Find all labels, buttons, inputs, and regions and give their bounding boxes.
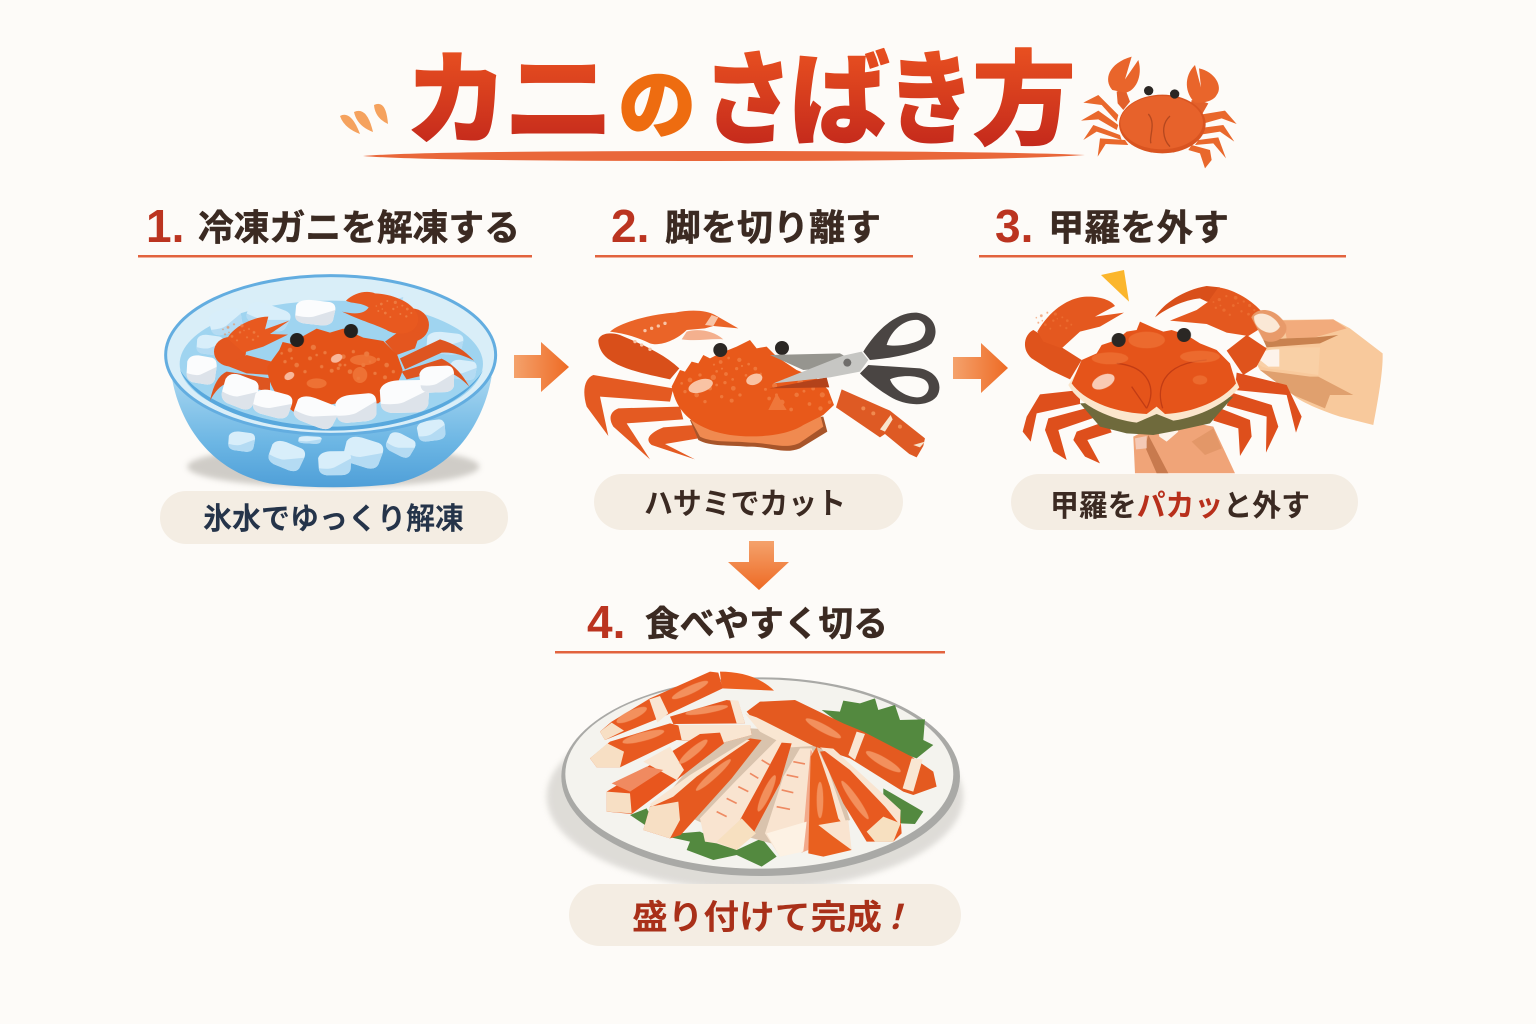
fan piece H bbox=[820, 750, 902, 842]
title text: ば bbox=[790, 44, 890, 158]
submerged ice bbox=[228, 417, 448, 478]
step 1 heading bbox=[138, 200, 532, 258]
step 3 heading bbox=[979, 200, 1346, 258]
icon: yellow accent triangle bbox=[1101, 270, 1129, 302]
fan piece G bbox=[808, 747, 852, 857]
carapace bbox=[267, 329, 403, 412]
step 3 illustration: hands opening crab shell bbox=[1023, 270, 1383, 473]
thumb bbox=[1251, 310, 1286, 342]
step 2 heading: 脚を切り離す bbox=[665, 207, 881, 248]
step 4 illustration: plated crab legs bbox=[547, 672, 963, 890]
step 3 heading: 3. bbox=[995, 200, 1033, 252]
left claw bbox=[214, 317, 289, 375]
garnish leaves bbox=[630, 698, 933, 867]
title block bbox=[340, 44, 1237, 168]
leg piece A2 bbox=[670, 700, 745, 724]
caption pill: step 1: 氷水でゆっくり解凍 bbox=[203, 503, 464, 536]
crab leg pieces bbox=[590, 672, 937, 857]
fan piece E bbox=[700, 740, 792, 850]
crab bbox=[584, 311, 834, 459]
caption pill: step 1 bbox=[160, 491, 508, 544]
caption pill: step 4: ！ bbox=[878, 899, 912, 937]
leg piece A bbox=[600, 672, 723, 740]
step 1 illustration: crab in ice water bowl bbox=[166, 276, 496, 487]
right long leg bbox=[747, 700, 937, 795]
right claw bbox=[1155, 286, 1267, 375]
step 2 heading bbox=[595, 200, 913, 258]
bowl rim bbox=[166, 276, 496, 434]
step 1 heading: 冷凍ガニを解凍する bbox=[198, 207, 520, 248]
arrow: step 2 to 3 bbox=[953, 343, 1008, 393]
leg piece B bbox=[590, 723, 752, 767]
right hand bbox=[1257, 319, 1383, 425]
fan piece D bbox=[643, 738, 762, 838]
legs bbox=[584, 375, 698, 459]
caption pill: step 4: 盛り付けて完成 bbox=[632, 899, 882, 937]
hub shadow under fan bbox=[660, 727, 850, 847]
claw tip bbox=[720, 672, 774, 691]
step 2 heading: 2. bbox=[611, 200, 649, 252]
right claw bbox=[342, 292, 429, 355]
bowl shadow bbox=[187, 446, 479, 487]
legs bbox=[1023, 373, 1302, 463]
legs bbox=[210, 339, 474, 401]
plate shadow bbox=[547, 703, 963, 890]
title underline bbox=[363, 151, 1085, 161]
step 2 illustration: crab and scissors bbox=[584, 311, 939, 459]
step 4 heading bbox=[555, 596, 945, 654]
plate bbox=[561, 677, 960, 876]
back ice bbox=[197, 292, 477, 380]
title text bbox=[405, 44, 1076, 158]
carapace bbox=[672, 340, 834, 436]
upper claw bbox=[598, 311, 738, 379]
severed leg bbox=[836, 389, 925, 457]
fan piece F bbox=[765, 748, 815, 857]
title text: ニ bbox=[503, 44, 615, 158]
caption pill: step 2 bbox=[594, 474, 903, 530]
step 3 heading: 甲羅を外す bbox=[1048, 207, 1229, 248]
title text: き bbox=[887, 44, 975, 158]
step 4 heading: 食べやすく切る bbox=[645, 605, 888, 644]
meat texture highlights bbox=[615, 678, 903, 821]
step 4 heading: 4. bbox=[587, 596, 625, 648]
caption pill: step 3: 甲羅をパカッと外す bbox=[1050, 490, 1310, 523]
front ice bbox=[187, 355, 457, 432]
carapace bbox=[1072, 322, 1236, 414]
left claw bbox=[1025, 297, 1124, 379]
caption pill: step 2: ハサミでカット bbox=[644, 488, 846, 521]
bottom hand bbox=[1133, 423, 1235, 473]
arrow: step 1 to 2 bbox=[514, 342, 569, 392]
icon: motion marks bbox=[340, 104, 388, 134]
crab bbox=[210, 292, 474, 412]
title text: 方 bbox=[972, 44, 1076, 158]
water surface bbox=[180, 301, 483, 427]
step 1 heading: 1. bbox=[146, 200, 184, 252]
caption pill: step 4 bbox=[569, 884, 961, 946]
leg piece C bbox=[607, 733, 724, 814]
shell rim bbox=[1068, 367, 1239, 423]
arrow: step 2 down to 4 bbox=[728, 541, 789, 590]
shell underside bbox=[690, 417, 827, 451]
bowl body bbox=[172, 377, 492, 487]
under-shell bbox=[1080, 397, 1233, 435]
caption pill: step 3 bbox=[1011, 474, 1358, 530]
title text: カ bbox=[405, 44, 508, 158]
scissors bbox=[769, 313, 939, 404]
icon: title crab bbox=[1081, 57, 1237, 168]
title text: さ bbox=[703, 44, 793, 158]
title text: の bbox=[618, 64, 696, 149]
